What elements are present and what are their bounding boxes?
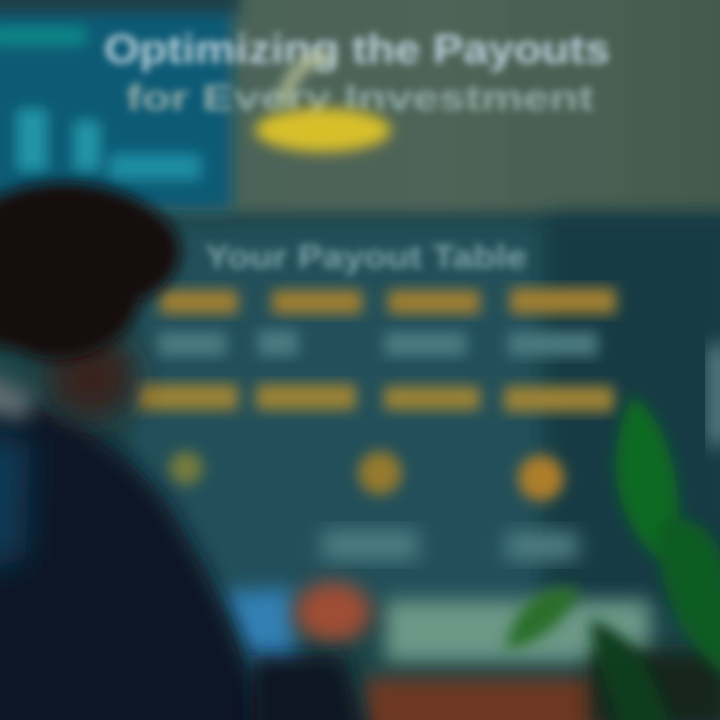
bottom desk area	[365, 600, 720, 720]
icons: amber circles	[169, 451, 564, 501]
panel: top-left teal screen	[0, 0, 240, 210]
plant	[505, 395, 720, 720]
title	[104, 26, 610, 118]
panel: main chart board	[130, 216, 720, 606]
title: for Every Investment	[126, 77, 594, 118]
person: laptop and hand	[222, 582, 371, 680]
icon: yellow lamp	[255, 58, 391, 152]
table: second amber row	[138, 384, 614, 412]
icon: right edge light strip	[710, 345, 720, 445]
chart heading: Your Payout Table	[205, 238, 527, 275]
title: Optimizing the Payouts	[104, 26, 610, 72]
person: silhouette	[0, 182, 370, 720]
text blocks: captions under circles	[322, 530, 578, 560]
table: header row	[160, 288, 616, 314]
table: value row	[158, 330, 598, 356]
